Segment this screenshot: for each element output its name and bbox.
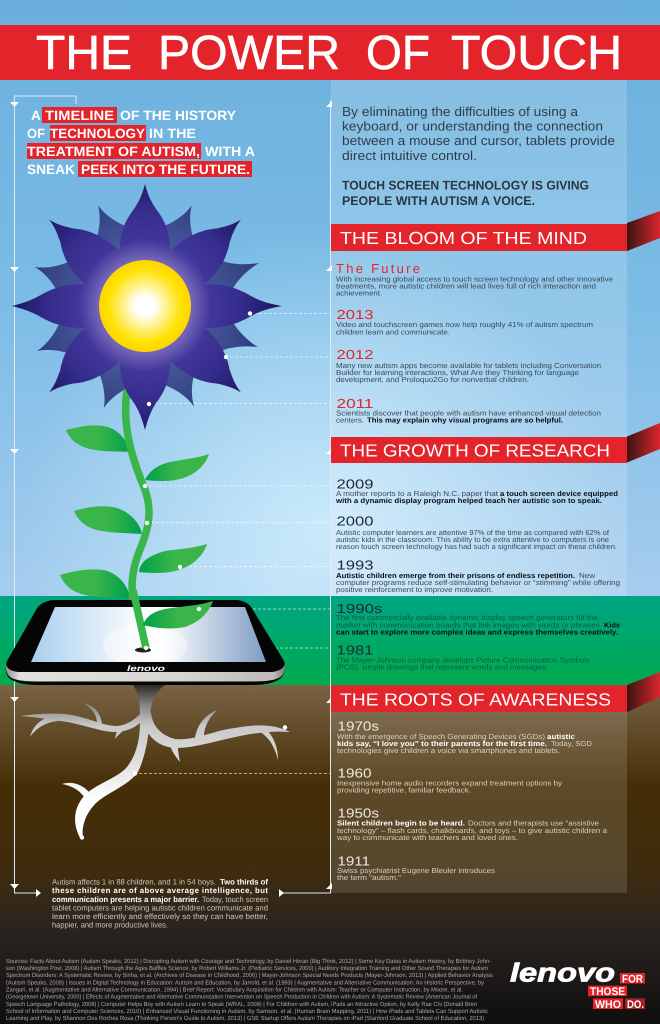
statistics paragraph: learn more efficiently and effectively so they can have better, — [52, 912, 268, 921]
lenovo logo: lenovo — [510, 958, 615, 988]
callout statement: TOUCH SCREEN TECHNOLOGY IS GIVING — [342, 178, 589, 192]
entry: 2012: Builder for learning interactions, What Are they Thinking for language — [336, 368, 579, 377]
lenovo logo: DO. — [627, 999, 644, 1011]
entry: 2009: A mother reports to a Raleigh N.C. paper that — [336, 489, 498, 498]
dashed leader lines — [139, 314, 331, 774]
entry: The Future: The Future — [336, 261, 420, 276]
entry: 1970s: Today, SGD — [551, 739, 592, 748]
entry: 1993: positive reinforcement to improve motivation. — [336, 585, 493, 594]
entry: 1911: Swiss psychiatrist Eugene Bleuler introduces — [337, 866, 495, 875]
section banner: growth: THE GROWTH OF RESEARCH — [340, 441, 610, 461]
entry: 2011: Scientists discover that people with autism have enhanced visual detection — [336, 408, 601, 417]
statistics paragraph: Autism affects 1 in 88 children, and 1 in 54 boys. — [52, 878, 216, 886]
title banner — [0, 25, 660, 80]
flower center — [99, 260, 191, 352]
sources: School of Information and Computer Sciences, 2010) | Enhanced Visual Functioning in Autism, by Samson, et al. (Human Brain Mapping, 2011) | How iPads and Tablets Can Support Autistic — [6, 1008, 488, 1015]
entry: 1981: 1981 — [336, 643, 374, 658]
background grass — [0, 596, 660, 686]
intro heading: PEEK INTO THE FUTURE. — [81, 162, 250, 177]
intro text: By eliminating the difficulties of using a — [342, 104, 579, 119]
section banner: growth — [331, 423, 660, 463]
title banner: THE — [36, 27, 132, 80]
entry: 1970s — [337, 719, 592, 755]
entry: 2012: Many new autism apps become available for tablets including Conversation — [336, 361, 601, 370]
illustration: roots — [20, 685, 290, 838]
intro heading: SNEAK — [27, 162, 75, 177]
tablet screen — [31, 607, 266, 662]
intro text — [342, 104, 615, 163]
entry: 1960: Inexpensive home audio recorders expand treatment options by — [337, 778, 562, 788]
entry: 2000 — [336, 514, 617, 551]
sources: Sources: Facts About Autism (Autism Speaks, 2012) | Disrupting Autism with Courage and Technology, by Daniel Horan (Big Think, 2012) | Some Key Dates in Autism History, by Brittney John- — [6, 958, 491, 965]
callout statement — [342, 178, 589, 208]
sources — [6, 958, 493, 1022]
entry: 2000: autistic kids in the classroom. This ability to be extra attentive to computers is one — [336, 535, 609, 544]
entry: 1993: New — [579, 571, 596, 580]
entry: 1990s: Kids — [604, 620, 620, 629]
entry: 1960: 1960 — [338, 765, 372, 780]
tablet bezel edge — [6, 664, 285, 682]
sources: (Autism Speaks, 2009) | Issues in Digital Technology in Education: Autism and Education, by Jarrold, et al. (1993) | Augmentative and Alternative Communication: An Historic Perspective, by — [6, 979, 484, 986]
entry: 2013 — [336, 307, 593, 336]
section banner: roots — [331, 672, 660, 712]
intro heading: OF — [27, 126, 45, 141]
entry: 1993: 1993 — [336, 558, 374, 573]
entry: 1950s — [336, 805, 608, 842]
statistics paragraph — [52, 878, 268, 930]
section banner: roots: THE ROOTS OF AWARENESS — [340, 690, 611, 710]
entry: 1993: Autistic children emerge from their prisons of endless repetition. — [336, 571, 575, 580]
intro heading: A — [31, 108, 41, 123]
intro heading: TECHNOLOGY — [50, 126, 145, 141]
lenovo logo — [510, 958, 645, 1011]
entry: 2011: centers. — [336, 416, 364, 424]
flower back petals — [27, 195, 268, 417]
entry: 1950s: Doctors and therapists use “assistive — [468, 819, 599, 828]
sources: Learning and Play, by Shannon Des Roches Rosa (Thinking Person's Guide to Autism, 2013) | GSE Startup Offers Autism Therapies on iPad (Stanford Graduate School of Education, 2013) — [6, 1015, 484, 1022]
entry: The Future: With increasing global access to touch screen technology and other innovative — [336, 274, 613, 283]
entry: The Future: treatments, more autistic children will lead lives full of rich interaction and — [336, 281, 596, 290]
entry: 1981: The Mayer-Johnson company develops Picture Communication Symbols — [336, 655, 590, 664]
entry: 1990s: 1990s — [336, 601, 383, 616]
entry: 1970s: autistic — [547, 732, 575, 741]
background sky — [0, 0, 660, 600]
statistics paragraph: communication presents a major barrier. — [52, 895, 199, 904]
illustration: tablet — [6, 600, 285, 685]
intro heading: OF THE HISTORY — [120, 108, 236, 123]
entry: 2009: with a dynamic display program helped teach her autistic son to speak. — [335, 496, 602, 505]
section banner: bloom — [331, 211, 660, 251]
intro text: direct intuitive control. — [342, 148, 477, 163]
statistics paragraph: these children are of above average intelligence, but — [52, 886, 268, 895]
entry: 1970s: 1970s — [338, 719, 380, 734]
entry: 1911 — [337, 853, 495, 882]
entry: 1911: 1911 — [338, 853, 370, 868]
entry: 2012: 2012 — [336, 347, 374, 362]
panel: timeline column soil — [331, 712, 627, 893]
entry: 2011: This may explain why visual programs are so helpful. — [367, 416, 563, 424]
lenovo logo: WHO — [595, 999, 621, 1011]
screen hole — [135, 648, 151, 652]
intro text: between a mouse and cursor, tablets provide — [342, 133, 615, 148]
intro heading: IN THE — [149, 126, 196, 141]
entry: 1950s: way to communicate with teachers and loved ones. — [336, 833, 518, 842]
entry: 2013: Video and touchscreen games now help roughly 41% of autism spectrum — [336, 320, 593, 329]
illustration: stem through tablet — [133, 590, 213, 648]
sources: Spectrum Disorders: A Systematic Review, by Sinha, et al. (Archives of Disease in Childhood, 2006) | Mayer-Johnson Special Needs Products (Mayer-Johnson, 2013) | Applied Behavior Analysis — [6, 972, 493, 979]
flower front petals — [12, 184, 282, 430]
entry: 1970s: kids say, “I love you” to their parents for the first time. — [337, 739, 547, 748]
entry: 1950s: 1950s — [338, 805, 380, 820]
statistics paragraph: Two thirds of — [220, 878, 268, 886]
entry: 2000: 2000 — [336, 514, 374, 529]
entry: 2009: 2009 — [336, 476, 374, 491]
entry: 1981: (PCS), simple drawings that represent words and messages. — [336, 663, 548, 672]
lenovo logo: FOR — [622, 973, 643, 985]
sources: Speech Language Pathology, 2008) | Computer Helps Boy with Autism Learn to Speak (WRAL, 2009) | For Children with Autism, iPads an Attractive Option, by Kelly Rae Chi (Donald Bren — [6, 1001, 477, 1008]
entry: 2013: 2013 — [336, 307, 374, 322]
sources: son (Washington Post, 2008) | Autism Through the Ages Baffles Science, by Robert Williams Jr. (Pediatric Services, 2000) | Auditory Integration Training and Other Sound Therapies for Autism — [6, 965, 488, 972]
entry: 2009 — [335, 476, 618, 505]
entry: 2011: 2011 — [336, 396, 374, 411]
sources: Zangari, et al. (Augmentative and Alternative Communication, 1994) | Brief Report: Vocabulary Acquisition for Children with Autism: Teacher or Computer Instruction, by Moore, et al. — [6, 986, 463, 993]
tablet body — [6, 600, 285, 685]
entry: 1993: computer programs reduce self-stimulating behavior or “stimming” while offering — [336, 578, 620, 587]
entry: 1970s: With the emergence of Speech Generating Devices (SGDs) — [337, 732, 545, 741]
intro heading: TREATMENT OF AUTISM, — [27, 144, 200, 159]
background soil — [0, 685, 660, 1024]
entry: 2011 — [336, 396, 601, 424]
statistics paragraph: tablet computers are helping autistic children communicate and — [52, 903, 268, 912]
intro heading — [27, 107, 255, 177]
entry: 1970s: technologies give children a voice via smartphones and tablets. — [337, 746, 560, 755]
entry: 1990s: can start to explore more complex ideas and express themselves creatively. — [336, 628, 618, 636]
entry: 1993 — [336, 558, 620, 594]
intro heading: TIMELINE — [45, 108, 114, 123]
entry: 1960 — [337, 765, 562, 794]
title banner: TOUCH — [451, 27, 622, 80]
entry: 1990s: The first commercially available dynamic display speech generators hit the — [336, 613, 598, 622]
timeline dots — [80, 311, 287, 840]
entry: 2009: a touch screen device equipped — [500, 489, 618, 498]
timeline brackets — [10, 96, 332, 897]
entry: 1911: the term “autism.” — [337, 873, 402, 882]
panel: timeline column sky — [331, 80, 627, 596]
entry: The Future — [336, 261, 613, 298]
stem and leaves — [60, 390, 209, 600]
lenovo logo: THOSE — [590, 986, 625, 998]
entry: 1990s — [336, 601, 620, 636]
entry: 1960: providing repetitive, familiar feedback. — [337, 786, 471, 794]
entry: 1981 — [336, 643, 590, 672]
tablet logo: lenovo — [127, 664, 165, 673]
entry: The Future: achievement. — [336, 288, 382, 298]
entry: 2000: Autistic computer learners are attentive 97% of the time as compared with 62% of — [336, 528, 610, 537]
entry: 1950s: technology” – flash cards, chalkboards, and toys – to give autistic children a — [337, 826, 608, 835]
entry: 2012 — [336, 347, 601, 384]
entry: 2000: reason touch screen technology has had such a significant impact on these children. — [336, 542, 617, 551]
statistics paragraph: Today, touch screen — [202, 895, 268, 904]
statistics paragraph: happier, and more productive lives. — [52, 920, 168, 930]
callout statement: PEOPLE WITH AUTISM A VOICE. — [342, 194, 535, 208]
title banner: OF — [366, 27, 430, 80]
intro heading: WITH A — [205, 144, 255, 159]
entry: 1950s: Silent children begin to be heard. — [337, 819, 465, 828]
entry: 2012: development, and Proloquo2Go for nonverbal children. — [336, 375, 529, 384]
entry: 1990s: market with communication boards that link images with words or phrases. — [336, 620, 602, 629]
entry: 2013: children learn and communicate. — [336, 327, 450, 336]
section banner: bloom: THE BLOOM OF THE MIND — [340, 228, 587, 248]
title banner: POWER — [158, 27, 340, 80]
intro text: keyboard, or understanding the connection — [342, 118, 603, 134]
sources: (Georgetown University, 2000) | Effects of Augmentative and Alternative Communication Intervention on Speech Production in Children with Autism: A Systematic Review (American Journal of — [6, 994, 477, 1001]
